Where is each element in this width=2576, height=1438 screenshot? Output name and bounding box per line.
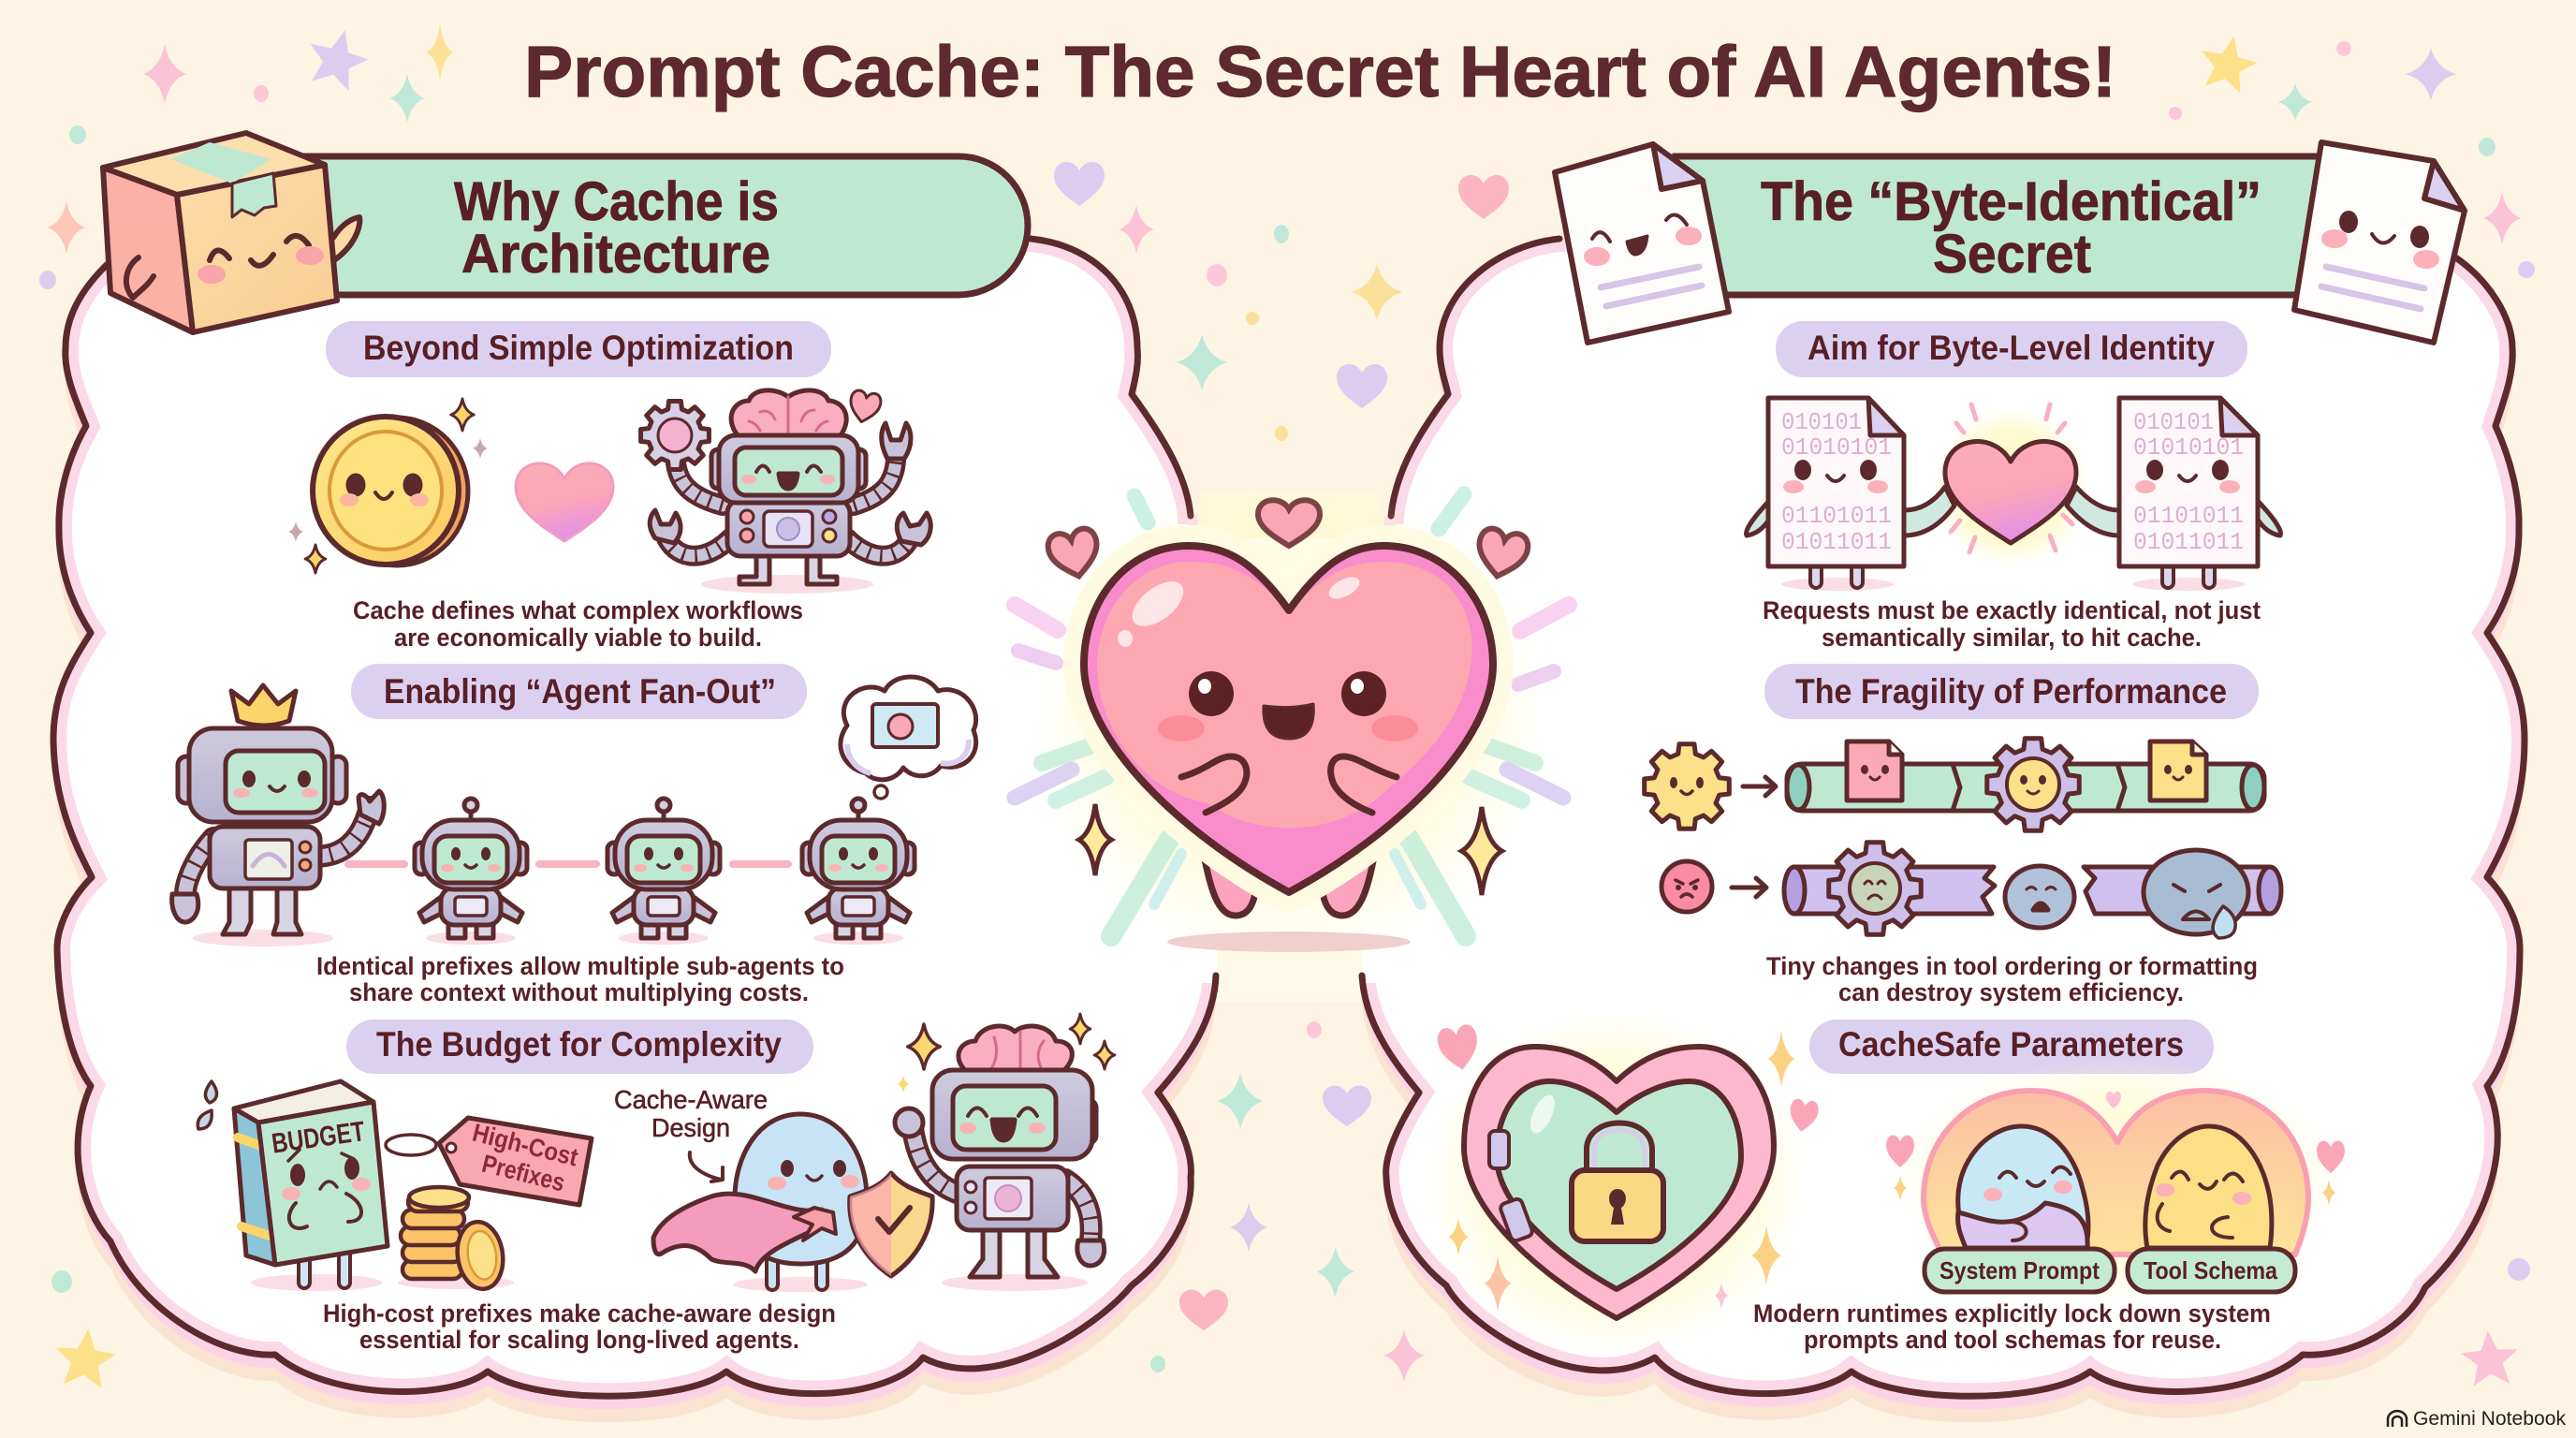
diagram: healthy pipeline: [1645, 739, 2264, 830]
centre: glow behind heart: [1032, 482, 1546, 960]
heart highlight face: [1097, 562, 1472, 828]
right header text: [1761, 171, 2261, 285]
caption: share context without multiplying costs.: [349, 978, 809, 1006]
icon: sub-agent robot 1: [415, 799, 527, 945]
left header banner: [281, 156, 1028, 295]
eyes: [1189, 671, 1386, 716]
subheading: CacheSafe Parameters: CacheSafe Parameters: [1838, 1025, 2184, 1064]
icon: high-cost prefixes tag: Prefixes: [479, 1150, 568, 1197]
caption: [1753, 1299, 2271, 1354]
caption: [323, 1299, 836, 1354]
subheading: Enabling Agent Fan-Out: [351, 664, 807, 719]
cheeks: [1158, 715, 1418, 741]
panel: left cloud background: [53, 239, 1216, 1422]
subheading: CacheSafe Parameters: [1809, 1020, 2214, 1074]
caption: Identical prefixes allow multiple sub-agents to: [316, 952, 844, 980]
caption: Tiny changes in tool ordering or formatting: [1766, 952, 2258, 980]
icon: big robot with crown: [172, 685, 384, 946]
subheading: The Fragility of Performance: The Fragility of Performance: [1795, 672, 2227, 711]
callout: Cache-Aware Design: Cache-Aware: [614, 1085, 768, 1114]
icon: budget book: [198, 1081, 436, 1291]
icon: blue hero with cape and shield: [653, 1114, 932, 1292]
icon: high-cost prefixes tag: High-Cost: [470, 1119, 581, 1172]
left header text: Architecture: [461, 224, 770, 285]
mouth: [1264, 704, 1313, 739]
subheading: Aim for Byte-Level Identity: [1776, 321, 2247, 377]
icon: happy robot with brain: [895, 1014, 1115, 1291]
caption: essential for scaling long-lived agents.: [359, 1326, 799, 1354]
title: Prompt Cache: The Secret Heart of AI Agents!: [524, 32, 2116, 112]
icon: right document mascot: [2294, 142, 2465, 343]
heart halo: [1084, 546, 1493, 892]
icon: locked heart vault: [1425, 1008, 1820, 1355]
subheading: Enabling Agent Fan-Out: Enabling “Agent Fan-Out”: [384, 672, 776, 711]
subheading: Beyond Simple Optimization: [326, 321, 831, 377]
icon: high-cost prefixes tag: [439, 1118, 592, 1205]
callout: Cache-Aware Design: Design: [651, 1113, 730, 1142]
centre: rainbow light rays: [1015, 494, 1569, 936]
centre white bridge between the panels: [1048, 492, 1530, 1002]
icon: identical documents joined by heart: 01010101: [2133, 433, 2244, 462]
caption: [1766, 952, 2258, 1006]
heart outline: [1084, 546, 1493, 892]
icon: cardboard box mascot: [103, 133, 359, 332]
icon: identical documents joined by heart: 010101: [2133, 408, 2214, 436]
icon: sub-agent robot 2: [607, 799, 720, 945]
right header banner: [1676, 156, 2331, 295]
label: System Prompt: [1925, 1249, 2115, 1292]
icon: four-armed robot with brain: [641, 389, 930, 594]
icon: pink heart: [516, 463, 613, 541]
left header text: [454, 171, 779, 285]
caption: Requests must be exactly identical, not just: [1763, 596, 2261, 624]
caption: [316, 952, 844, 1006]
subheading: Aim for Byte-Level Identity: Aim for Byte-Level Identity: [1808, 329, 2215, 367]
panel outlines: [53, 239, 2525, 1396]
label: Tool Schema: Tool Schema: [2144, 1256, 2277, 1284]
icon: identical documents joined by heart: 01101011: [1781, 502, 1892, 530]
centre: floor shadow: [1167, 932, 1411, 952]
caption: [1763, 596, 2261, 652]
icon: thought cloud with image: [841, 677, 976, 799]
diagram: broken pipeline: [1661, 843, 2281, 938]
subheading: Beyond Simple Optimization: Beyond Simple Optimization: [363, 329, 794, 367]
right header text: Secret: [1933, 224, 2091, 285]
crown: [231, 685, 296, 726]
icon: identical documents joined by heart: [1747, 398, 2280, 591]
icon: small hearts around the central heart: [1046, 500, 1530, 581]
label: System Prompt: System Prompt: [1939, 1256, 2100, 1284]
arms: [1181, 756, 1397, 813]
caption: prompts and tool schemas for reuse.: [1804, 1326, 2221, 1354]
legs: [1202, 847, 1376, 916]
icon: sub-agent robot 3: [802, 799, 915, 945]
left header text: Why Cache is: [454, 171, 779, 232]
icon: left document mascot: [1555, 144, 1729, 343]
icon: identical documents joined by heart: 01010101: [1781, 433, 1892, 462]
icon: budget book: BUDGET: [270, 1116, 367, 1160]
icon: central heart mascot: [1084, 546, 1493, 916]
subheading: The Budget for Complexity: [346, 1020, 813, 1074]
icon: identical documents joined by heart: 01101011: [2133, 502, 2244, 530]
caption: are economically viable to build.: [394, 624, 762, 652]
icon: system prompt and tool schema hugging in heart: [1886, 1058, 2345, 1301]
caption: [353, 596, 803, 652]
icon: coin stack: [398, 1187, 514, 1292]
caption: can destroy system efficiency.: [1838, 978, 2184, 1006]
caption: High-cost prefixes make cache-aware design: [323, 1299, 836, 1328]
label: Tool Schema: [2128, 1249, 2295, 1292]
icon: smiling coin: [288, 399, 488, 573]
subheading: The Budget for Complexity: The Budget for Complexity: [376, 1025, 782, 1064]
caption: semantically similar, to hit cache.: [1822, 624, 2202, 652]
connectors between sub-agents: [348, 860, 788, 868]
icon: identical documents joined by heart: 01011011: [2133, 528, 2244, 556]
caption: Modern runtimes explicitly lock down system: [1753, 1299, 2271, 1328]
callout: Cache-Aware Design: [614, 1085, 768, 1181]
subheading: The Fragility of Performance: [1764, 664, 2259, 719]
icon: identical documents joined by heart: 010101: [1781, 408, 1862, 436]
icon: identical documents joined by heart: 01011011: [1781, 528, 1892, 556]
watermark: Gemini Notebook: Gemini Notebook: [2413, 1408, 2566, 1430]
icon: gold sparkles by the central heart: [1079, 804, 1502, 895]
caption: Cache defines what complex workflows: [353, 596, 803, 624]
highlights: [1118, 573, 1363, 647]
heart body: [1084, 546, 1493, 892]
panel: right cloud background: [1362, 239, 2525, 1422]
right header text: The “Byte-Identical”: [1761, 171, 2261, 232]
